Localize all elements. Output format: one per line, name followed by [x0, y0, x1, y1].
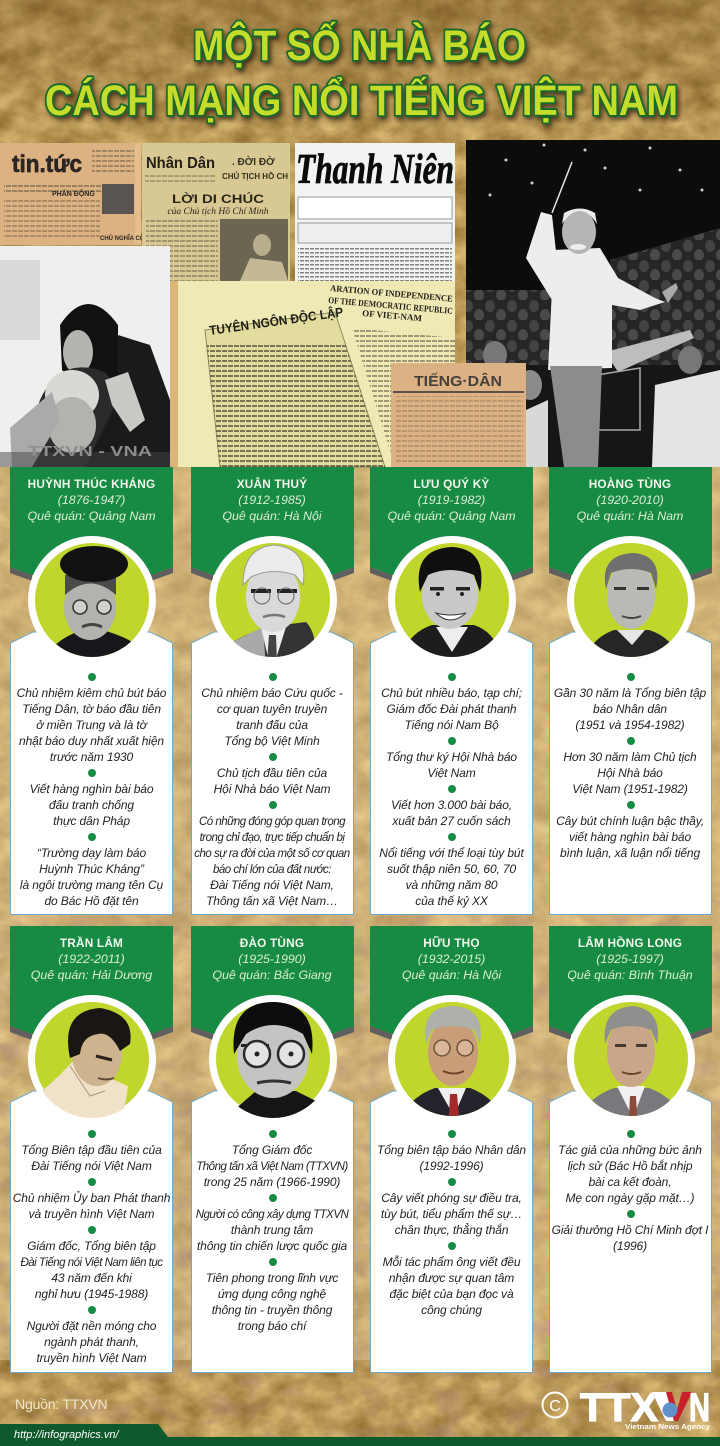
header text: Quê quán: Hà Nam: [577, 509, 683, 523]
biography text: [377, 1130, 526, 1317]
biography text: Đài Tiếng nói Việt Nam liên tục: [20, 1257, 163, 1269]
photo: mother and son embrace: TTXVN - VNA: [28, 443, 152, 460]
photo: Ho Chi Minh conducting an orchestra: [466, 140, 720, 467]
biography text: truyền hình Việt Nam: [36, 1351, 147, 1365]
biography text: Việt Nam Viết hơn 3.000 bài báo,: [391, 766, 512, 812]
biography text: [554, 673, 706, 860]
biography text: [13, 1130, 170, 1365]
newspaper: Declaration of Independence: OF THE DEMOCRATIC REPUBLIC: [328, 295, 453, 316]
biography text: tùy bút, tiểu phẩm thế sự…: [381, 1207, 522, 1221]
header text: [577, 477, 683, 523]
header banner: [548, 926, 712, 1040]
biography text: thông tin chiến lược quốc gia Tiên phong trong lĩnh vực: [197, 1239, 347, 1285]
card graphic: Lâm Hồng Long: [549, 926, 712, 1373]
biography text: bài ca kết đoàn,: [589, 1175, 671, 1189]
header text: HOÀNG TÙNG: [589, 477, 671, 491]
newspaper: Tuyên Ngôn Độc Lập: TUYÊN NGÔN ĐỘC LẬP: [208, 304, 344, 338]
card graphic: Trần Lâm: [10, 926, 173, 1373]
biography text: chân thực, thẳng thắn Mỗi tác phẩm ông viết đều: [383, 1223, 520, 1269]
biography text: tranh đấu của: [236, 718, 308, 732]
biography text: (1996): [613, 1239, 647, 1253]
newspaper: Tuyên Ngôn Độc Lập: [200, 304, 390, 467]
biography text: [17, 673, 166, 908]
white text panel: [10, 632, 172, 914]
newspaper: Nhân Dân: CHỦ TỊCH HỒ CH: [222, 170, 288, 181]
newspaper: Nhân Dân: của Chủ tịch Hồ Chí Minh: [167, 206, 269, 217]
biography text: và những năm 80: [406, 878, 497, 892]
portrait: Hoàng Tùng: [566, 536, 694, 667]
biography text: trong báo chí: [238, 1319, 306, 1333]
newspaper: Nhân Dân: [142, 143, 290, 287]
logo: TTXVN Vietnam News Agency: [542, 1386, 710, 1431]
card graphic: Hoàng Tùng: [549, 467, 712, 915]
header text: (1925-1997): [596, 952, 664, 966]
header banner: [370, 926, 533, 1040]
header text: (1876-1947): [58, 493, 125, 507]
biography text: Thông tấn xã Việt Nam (TTXVN): [196, 1161, 348, 1173]
biography text: Hội Nhà báo: [597, 766, 663, 780]
header text: (1919-1982): [418, 493, 485, 507]
biography text: Tổng biên tập báo Nhân dân: [377, 1143, 526, 1157]
biography text: suốt thập niên 50, 60, 70: [387, 862, 516, 876]
header text: [387, 477, 516, 523]
biography text: của thế kỷ XX: [415, 894, 488, 908]
newspaper: Thanh Niên: Thanh Niên: [296, 147, 454, 193]
header text: [222, 477, 322, 523]
biography text: thông tin - truyền thông: [212, 1303, 332, 1317]
header text: Quê quán: Quảng Nam: [387, 509, 516, 523]
biography text: (1951 và 1954-1982) Hơn 30 năm làm Chủ tịch: [563, 718, 697, 764]
header text: Quê quán: Quảng Nam: [27, 509, 156, 523]
title: [45, 21, 678, 125]
logo: TTXVN Vietnam News Agency: N: [689, 1386, 710, 1430]
biography text: Tiếng Dân, tờ báo đầu tiên: [22, 702, 161, 716]
panel: Huỳnh Thúc Kháng: [10, 467, 173, 915]
white text panel: [549, 1091, 711, 1372]
header banner: [190, 926, 354, 1040]
newspaper: Tin Tức: tin.tức: [12, 151, 82, 178]
newspaper: Tiếng Dân: [391, 363, 526, 467]
panel: Xuân Thuỷ: [191, 467, 354, 915]
newspaper: Tiếng Dân: TIẾNG·DÂN: [414, 372, 502, 390]
white text panel: [549, 632, 711, 914]
logo: TTXVN Vietnam News Agency: Vietnam News Agency: [625, 1422, 710, 1431]
header text: Quê quán: Hải Dương: [31, 968, 152, 982]
biography text: cơ quan tuyên truyền: [217, 702, 327, 716]
source credit: Nguồn: TTXVN: [15, 1397, 107, 1413]
header text: [27, 477, 156, 523]
header banner: [370, 467, 533, 581]
white text panel: [10, 1091, 172, 1372]
newspaper: Tin Tức: [0, 143, 154, 245]
header text: [567, 936, 693, 982]
header text: Quê quán: Hà Nội: [402, 968, 501, 982]
biography text: Hội Nhà báo Việt Nam Có những đóng góp quan trọng: [199, 782, 345, 828]
biography text: 43 năm đến khi: [51, 1271, 132, 1285]
newspaper: Tin Tức: PHẢN ĐỘNG: [52, 189, 95, 198]
newspaper: Nhân Dân: LỜI DI CHÚC: [172, 193, 264, 206]
logo: TTXVN Vietnam News Agency: C: [549, 1398, 561, 1415]
biography text: trong chỉ đạo, trực tiếp chuẩn bị: [200, 832, 344, 844]
biography text: trước năm 1930 Viết hàng nghìn bài báo: [30, 750, 153, 796]
header text: HỮU THỌ: [423, 936, 480, 950]
panel: Lưu Quý Kỳ: [370, 467, 533, 915]
biography text: và truyền hình Việt Nam Giám đốc, Tổng biên tập: [27, 1207, 156, 1253]
biography text: Mẹ con ngày gặp mặt…) Giải thưởng Hồ Chí Minh đợt I: [552, 1191, 708, 1237]
biography text: ngành phát thanh,: [44, 1335, 139, 1349]
biography text: bình luận, xã luận nổi tiếng: [560, 846, 700, 860]
newspaper: Tin Tức: CHỦ NGHĨA CỘNG: [100, 234, 154, 242]
biography text: Tổng Giám đốc: [232, 1143, 312, 1157]
biography text: nhận được sự quan tâm: [389, 1271, 514, 1285]
biography text: Đài Tiếng nói Việt Nam Chủ nhiệm Ủy ban Phát thanh: [13, 1159, 170, 1205]
biography text: do Bác Hồ đặt tên: [44, 894, 139, 908]
biography text: trong 25 năm (1966-1990) Người có công xây dựng TTXVN: [196, 1175, 348, 1221]
panel: Lâm Hồng Long: [549, 926, 712, 1373]
panel: Đào Tùng: [191, 926, 354, 1373]
header text: (1920-2010): [596, 493, 664, 507]
header text: LÂM HỒNG LONG: [578, 936, 682, 950]
header banner: [548, 467, 712, 581]
biography text: đấu tranh chống: [49, 798, 134, 812]
panel: Hữu Thọ: [370, 926, 533, 1373]
biography text: ứng dụng công nghệ: [218, 1287, 326, 1301]
biography text: [194, 673, 350, 908]
panel: Trần Lâm: [10, 926, 173, 1373]
header text: Quê quán: Hà Nội: [222, 509, 322, 523]
biography text: thành trung tâm: [231, 1223, 313, 1237]
white text panel: [191, 1091, 353, 1372]
newspaper: Nhân Dân: Nhân Dân: [146, 155, 215, 172]
header text: LƯU QUÝ KỲ: [413, 477, 490, 491]
biography text: Việt Nam (1951-1982) Cây bút chính luận bậc thầy,: [556, 782, 704, 828]
header text: ĐÀO TÙNG: [240, 936, 304, 950]
header text: XUÂN THUỶ: [237, 477, 307, 491]
biography text: Thông tấn xã Việt Nam…: [206, 894, 338, 908]
biography text: Giám đốc Đài phát thanh: [386, 702, 516, 716]
biography text: báo Nhân dân: [593, 702, 667, 716]
portrait: Đào Tùng: [208, 995, 336, 1126]
portrait: Xuân Thuỷ: [208, 536, 336, 667]
footer bar: [0, 1424, 720, 1446]
biography text: xuất bản 27 cuốn sách Nổi tiếng với thể loại tùy bút: [379, 814, 524, 860]
white text panel: [370, 1091, 532, 1372]
header banner: [190, 467, 354, 581]
header text: (1912-1985): [238, 493, 306, 507]
card graphic: Xuân Thuỷ: [191, 467, 354, 915]
header text: TRẦN LÂM: [60, 936, 123, 950]
logo: TTXVN Vietnam News Agency: TTX: [580, 1386, 658, 1430]
biography text: báo chí lớn của đất nước:: [213, 864, 331, 876]
biography text: Tiếng nói Nam Bộ Tổng thư ký Hội Nhà báo: [386, 718, 517, 764]
photo: mother and son embrace: [0, 246, 170, 467]
portrait: Huỳnh Thúc Kháng: [28, 536, 156, 667]
biography text: Đài Tiếng nói Việt Nam,: [210, 878, 334, 892]
biography text: cho sự ra đời của một số cơ quan: [194, 848, 350, 860]
header banner: [10, 926, 173, 1040]
card graphic: Đào Tùng: [191, 926, 354, 1373]
portrait: Hữu Thọ: [388, 995, 516, 1126]
header text: (1932-2015): [418, 952, 485, 966]
biography text: Tổng bộ Việt Minh Chủ tịch đầu tiên của: [217, 734, 327, 780]
biography text: viết hàng nghìn bài báo: [569, 830, 691, 844]
header text: [402, 936, 502, 982]
white text panel: [191, 632, 353, 914]
biography text: thực dân Pháp “Trường dạy làm báo: [37, 814, 146, 860]
newspaper: Declaration of Independence: OF VIET-NAM: [362, 308, 423, 323]
biography text: nhật báo duy nhất xuất hiện: [19, 734, 164, 748]
biography text: Chủ bút nhiều báo, tạp chí;: [381, 686, 522, 700]
portrait: Lâm Hồng Long: [566, 995, 694, 1126]
biography text: Gần 30 năm là Tổng biên tập: [554, 686, 706, 700]
biography text: Tác giả của những bức ảnh: [558, 1143, 702, 1157]
header text: (1922-2011): [58, 952, 125, 966]
biography text: Huỳnh Thúc Kháng”: [39, 862, 144, 876]
biography text: [196, 1130, 349, 1333]
biography text: lịch sử (Bác Hồ bắt nhịp: [568, 1159, 692, 1173]
header text: Quê quán: Bắc Giang: [212, 968, 332, 982]
biography text: công chúng: [421, 1303, 482, 1317]
newspaper: Declaration of Independence: ARATION OF INDEPENDENCE: [330, 283, 453, 304]
header text: (1925-1990): [238, 952, 306, 966]
header text: HUỲNH THÚC KHÁNG: [28, 477, 155, 491]
biography text: nghỉ hưu (1945-1988) Người đặt nền móng cho: [27, 1287, 156, 1333]
biography text: [379, 673, 524, 908]
panel: Hoàng Tùng: [549, 467, 712, 915]
biography text: Chủ nhiệm kiêm chủ bút báo: [17, 686, 166, 700]
biography text: (1992-1996) Cây viết phóng sự điều tra,: [381, 1159, 522, 1205]
card graphic: Huỳnh Thúc Kháng: [10, 467, 173, 915]
header text: Quê quán: Bình Thuận: [567, 968, 693, 982]
header text: [31, 936, 152, 982]
newspaper: Nhân Dân: . ĐỜI ĐỜ: [232, 155, 275, 168]
portrait: Trần Lâm: [28, 995, 156, 1126]
card graphic: Hữu Thọ: [370, 926, 533, 1373]
header banner: [10, 467, 173, 581]
title: MỘT SỐ NHÀ BÁO: [193, 21, 526, 70]
white text panel: [370, 632, 532, 914]
biography text: là ngôi trường mang tên Cụ: [20, 878, 163, 892]
biography text: Tổng Biên tập đầu tiên của: [21, 1143, 162, 1157]
biography text: [552, 1130, 708, 1253]
newspaper: Thanh Niên: [295, 143, 455, 283]
footer url: http://infographics.vn/: [14, 1429, 119, 1441]
biography text: ở miền Trung và là tờ: [36, 718, 147, 732]
biography text: đặc biệt của bạn đọc và: [390, 1287, 514, 1301]
newspaper: Declaration of Independence: [170, 281, 455, 467]
card graphic: Lưu Quý Kỳ: [370, 467, 533, 915]
portrait: Lưu Quý Kỳ: [388, 536, 516, 667]
biography text: Chủ nhiệm báo Cứu quốc -: [201, 686, 343, 700]
header text: [212, 936, 332, 982]
